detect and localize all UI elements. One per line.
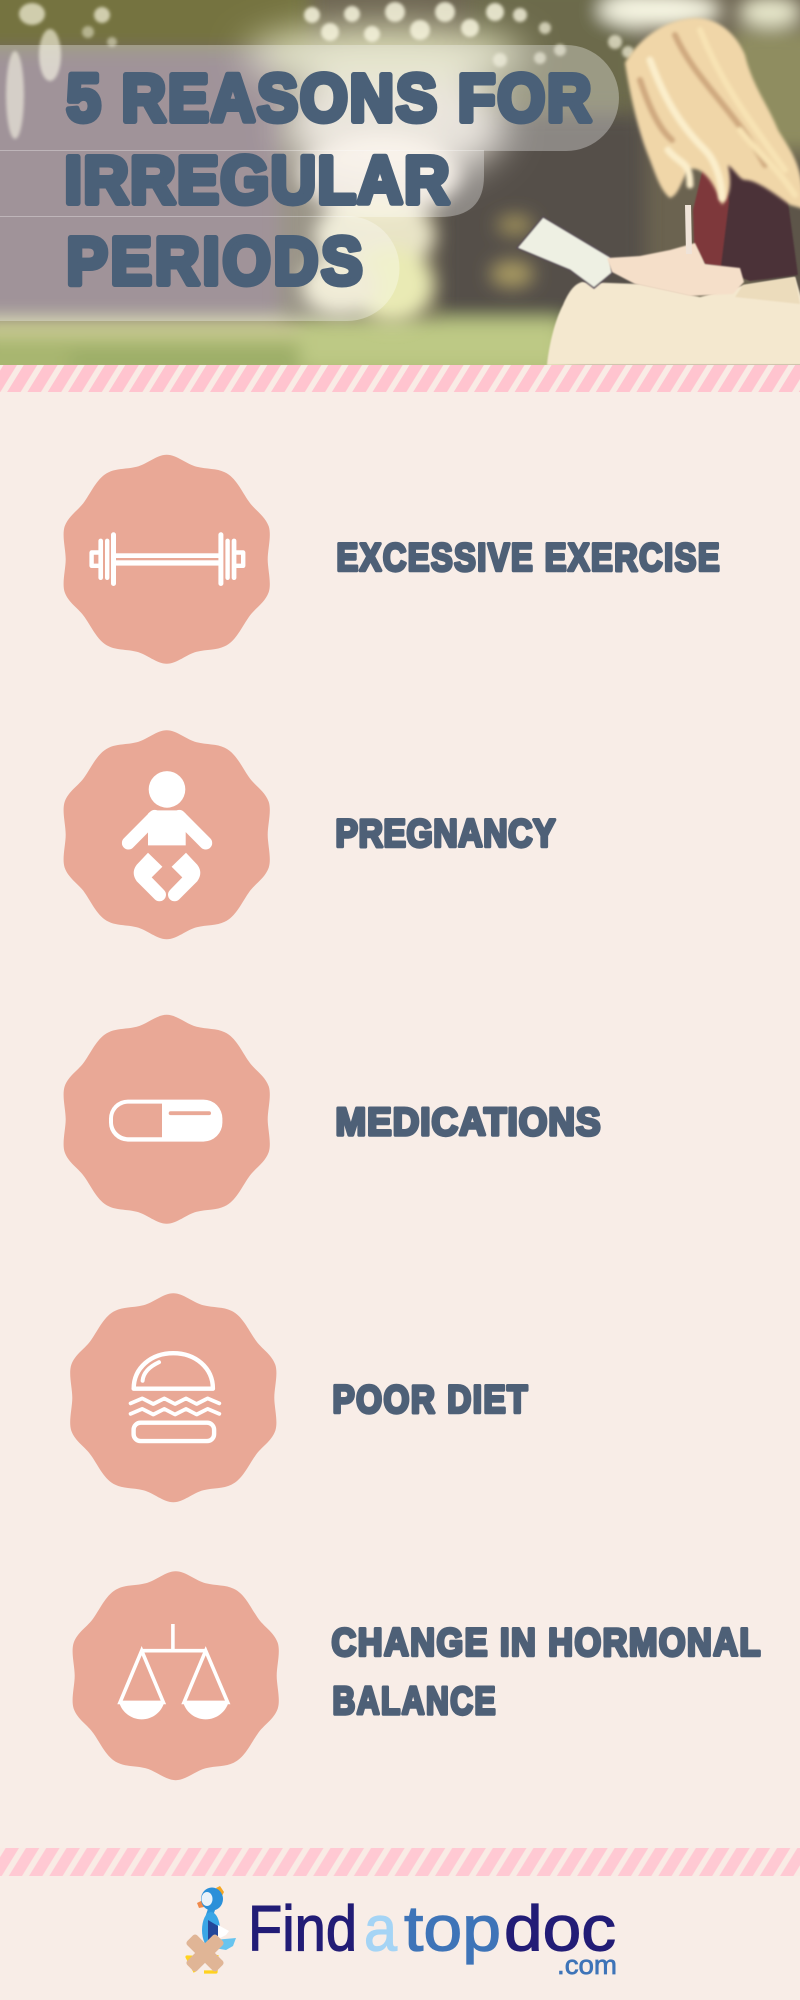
wordmark: doc	[504, 1893, 616, 1965]
Findatopdoc logo	[175, 1886, 617, 1983]
badge with scales icon	[73, 1571, 279, 1780]
label, two lines: BALANCE	[332, 1679, 495, 1723]
wordmark	[248, 1893, 616, 1965]
badge with burger icon	[70, 1293, 276, 1502]
striped divider: top	[0, 365, 800, 392]
title	[64, 61, 591, 299]
label: PREGNANCY	[336, 811, 555, 855]
striped divider: bottom	[0, 1848, 800, 1876]
label: EXCESSIVE EXERCISE	[336, 536, 720, 579]
reason 1: excessive exercise	[64, 455, 720, 664]
pill: second title line	[0, 150, 484, 217]
.com: .com	[557, 1950, 617, 1980]
label: MEDICATIONS	[336, 1101, 600, 1144]
bokeh highlights	[6, 2, 634, 139]
badge with baby icon	[64, 730, 270, 939]
pill: first title line	[0, 45, 619, 151]
woman's hair	[625, 18, 800, 209]
badge with capsule icon	[64, 1015, 270, 1224]
reason 2: pregnancy	[64, 730, 555, 939]
mascot: blue bird with bandage	[175, 1886, 236, 1983]
reason 4: poor diet	[70, 1293, 527, 1502]
title: PERIODS	[66, 224, 362, 299]
woman's skirt	[547, 277, 800, 365]
title: 5 REASONS FOR	[66, 61, 591, 136]
hair highlights and shadows	[640, 30, 795, 198]
title: IRREGULAR	[64, 142, 449, 217]
reason 5: change in hormonal balance	[73, 1571, 760, 1780]
label: POOR DIET	[332, 1377, 527, 1421]
label, two lines	[332, 1621, 760, 1723]
wordmark: Find	[248, 1893, 357, 1965]
waistband	[735, 277, 800, 304]
woman's top	[704, 166, 798, 282]
book pages	[517, 217, 612, 288]
reason 3: medications	[64, 1015, 600, 1224]
woman's red sleeve	[693, 168, 729, 266]
title banner with translucent pills	[0, 45, 619, 321]
label, two lines: CHANGE IN HORMONAL	[332, 1621, 760, 1664]
badge with barbell icon	[64, 455, 270, 664]
header photo: woman reading a book in a park	[0, 0, 800, 390]
pill: third title line	[0, 216, 400, 321]
woman's arm and hand	[607, 243, 744, 296]
wordmark: top	[404, 1893, 501, 1965]
necklace	[688, 205, 689, 254]
wordmark: a	[364, 1893, 397, 1965]
